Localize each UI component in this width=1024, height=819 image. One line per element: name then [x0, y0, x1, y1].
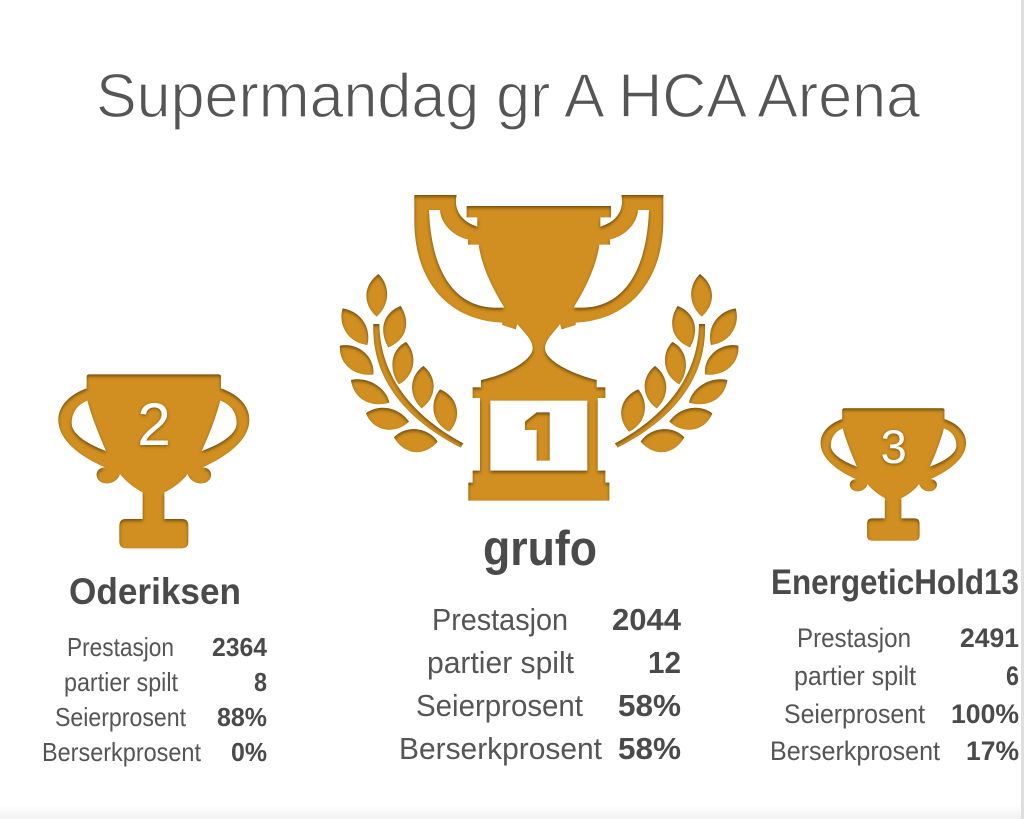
icon: first place trophy with laurels	[340, 195, 738, 501]
stats: EnergeticHold13: partier spilt	[794, 661, 916, 691]
stats: grufo: Seierprosent	[416, 688, 583, 723]
stats: Oderiksen	[42, 632, 268, 767]
stats: EnergeticHold13: Seierprosent	[784, 699, 925, 729]
stats: EnergeticHold13: Berserkprosent	[770, 736, 940, 766]
title: Supermandag gr A HCA Arena	[96, 62, 921, 131]
trophy number 3: 3	[881, 420, 907, 473]
icon: third place trophy	[821, 408, 966, 541]
stats: Oderiksen: 0%	[231, 737, 267, 767]
stats: Oderiksen: partier spilt	[64, 667, 179, 697]
stats: EnergeticHold13: 2491	[960, 623, 1019, 653]
panel: second place	[42, 374, 268, 767]
stats: grufo: 2044	[612, 602, 682, 637]
name: grufo: grufo	[483, 522, 597, 576]
stats: Oderiksen: 2364	[212, 632, 268, 662]
stats: grufo: Berserkprosent	[399, 731, 602, 766]
stats: grufo: 58%	[618, 731, 681, 766]
panel: first place	[340, 195, 738, 766]
stats: Oderiksen: 8	[254, 667, 267, 697]
stats: EnergeticHold13	[770, 623, 1019, 766]
stats: EnergeticHold13: 17%	[966, 736, 1019, 766]
stats: EnergeticHold13: Prestasjon	[797, 623, 911, 653]
icon: second place trophy	[58, 374, 249, 548]
stats: Oderiksen: Berserkprosent	[42, 737, 202, 767]
trophy number 2: 2	[137, 391, 171, 458]
stats: Oderiksen: Seierprosent	[55, 702, 187, 732]
stats: grufo: 12	[648, 645, 681, 680]
panel: third place	[770, 408, 1019, 766]
stats: Oderiksen: Prestasjon	[67, 632, 174, 662]
stats: grufo: Prestasjon	[432, 602, 568, 637]
stats: grufo: 58%	[618, 688, 681, 723]
stats: grufo: partier spilt	[427, 645, 574, 680]
stats: EnergeticHold13: 6	[1006, 661, 1019, 691]
stats: grufo	[399, 602, 682, 766]
stats: EnergeticHold13: 100%	[951, 699, 1019, 729]
name: Oderiksen: Oderiksen	[69, 571, 241, 612]
stats: Oderiksen: 88%	[217, 702, 267, 732]
